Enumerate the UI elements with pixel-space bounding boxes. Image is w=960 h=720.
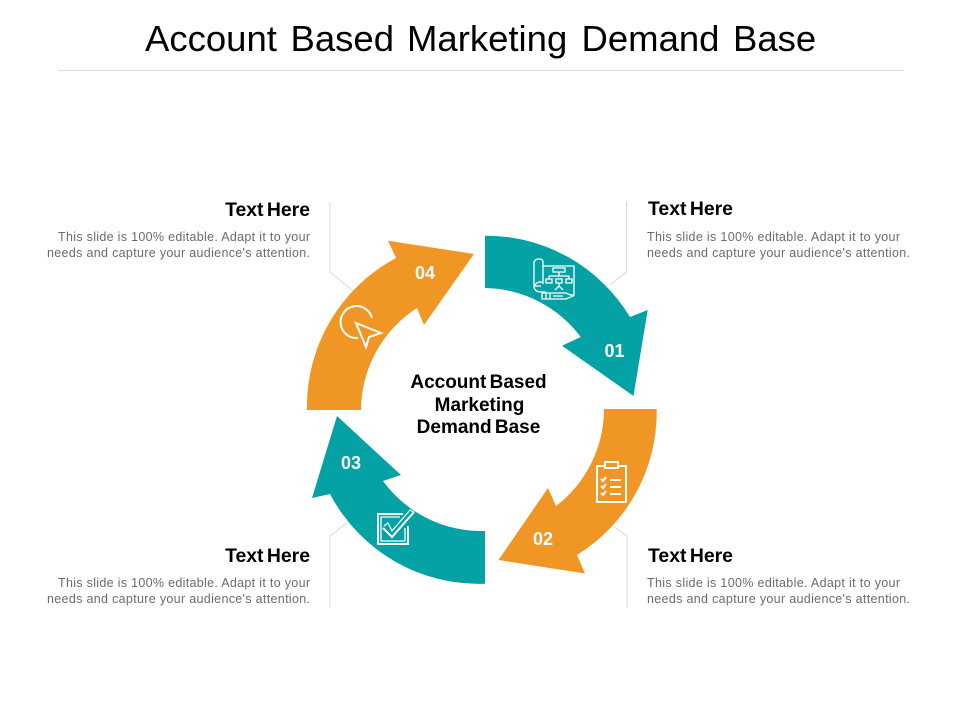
leader line: top right [610,202,626,285]
leader line: bottom left [330,522,348,608]
text block: top left: needs and capture your audience's attention. [47,246,310,260]
text block: bottom right: Text Here [648,545,733,567]
text block: top left [47,199,310,260]
icon: checkbox [378,510,414,544]
center label [410,372,547,438]
text block: bottom left: Text Here [225,545,310,567]
center label: Marketing [435,395,524,416]
arrow 04 [307,241,474,410]
text block: bottom right [647,545,910,606]
number 02: 02 [533,529,553,549]
text block: top right [647,198,910,260]
leader line: bottom right [613,526,627,608]
center label: Account Based [410,372,547,393]
text block: bottom left [47,545,310,606]
icon: clipboard checklist [597,462,626,502]
text block: bottom left: This slide is 100% editable. Adapt it to your [58,576,310,590]
arrow 02 [498,409,657,574]
arrow 03 [312,416,485,584]
title: Marketing [407,18,567,59]
arrow 01 [485,236,648,396]
text block: top left: Text Here [225,199,310,221]
title: Based [290,18,394,59]
title: Account [145,18,277,59]
title: Base [733,18,816,59]
number 04: 04 [415,263,435,283]
text block: top right: This slide is 100% editable. Adapt it to your [647,230,900,244]
text block: top right: needs and capture your audience's attention. [647,246,910,260]
center label: Demand Base [417,417,540,438]
icon: click cursor [341,306,381,347]
number 01: 01 [604,341,625,361]
text block: bottom right: needs and capture your audience's attention. [647,592,910,606]
icon: blueprint [534,259,574,299]
number 03: 03 [341,453,361,473]
text block: top right: Text Here [648,198,733,220]
text block: bottom right: This slide is 100% editable. Adapt it to your [647,576,900,590]
leader line: top left [330,202,353,291]
title: Demand [582,18,719,59]
text block: top left: This slide is 100% editable. Adapt it to your [58,230,310,244]
text block: bottom left: needs and capture your audience's attention. [47,592,310,606]
